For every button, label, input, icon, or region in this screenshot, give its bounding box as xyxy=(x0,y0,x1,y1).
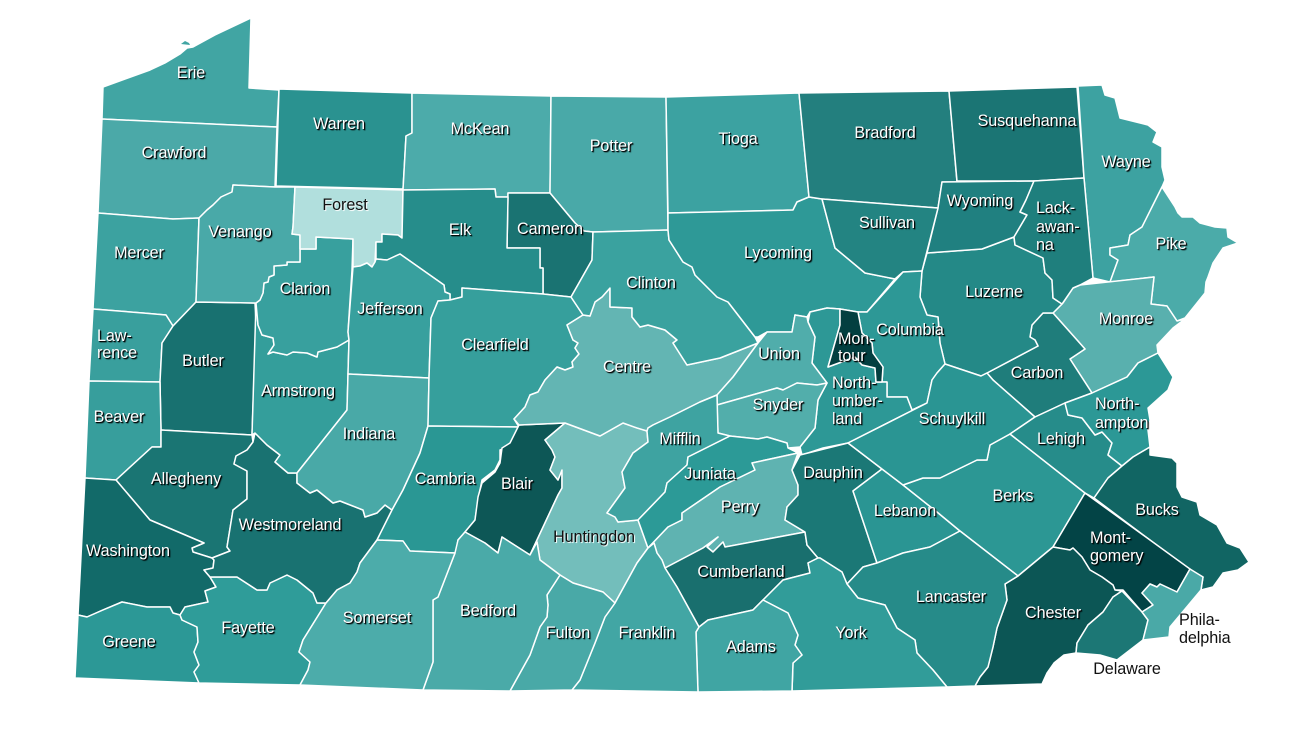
county: Washington xyxy=(78,478,216,617)
label: Clearfield: Clearfield xyxy=(461,336,529,354)
county: Juniata xyxy=(638,436,798,548)
county: Indiana xyxy=(297,374,429,517)
label: Lehigh: Lehigh xyxy=(1037,430,1085,448)
county: Beaver xyxy=(85,381,161,480)
county: Pike xyxy=(1110,187,1238,321)
county: Centre xyxy=(514,288,758,436)
county: Blair xyxy=(465,423,565,555)
county: Elk xyxy=(376,189,543,300)
label: McKean: McKean xyxy=(451,120,509,138)
label: Butler: Butler xyxy=(182,352,225,370)
county: Potter xyxy=(550,96,668,232)
label: Lawrence: rence xyxy=(97,344,137,362)
label: Forest: Forest xyxy=(322,196,368,214)
label: Clarion: Clarion xyxy=(280,280,330,298)
county: Fayette xyxy=(180,575,326,685)
county: Susquehanna xyxy=(949,87,1084,181)
label: Delaware: Delaware xyxy=(1093,660,1161,678)
county: Adams xyxy=(696,600,802,692)
county: Philadelphia xyxy=(1142,569,1203,640)
county: Allegheny xyxy=(116,430,253,558)
county: Northumberland xyxy=(800,308,927,455)
county: Butler xyxy=(160,302,256,435)
county labels xyxy=(86,64,1231,678)
label: Snyder: Snyder xyxy=(753,396,804,414)
label: Potter: Potter xyxy=(590,137,633,155)
label: Tioga: Tioga xyxy=(718,130,758,148)
label: Adams: Adams xyxy=(726,638,776,656)
label: Philadelphia: Phila- xyxy=(1179,611,1220,629)
county: Dauphin xyxy=(785,443,882,584)
county: Lycoming xyxy=(668,197,895,337)
county: Delaware xyxy=(1076,591,1148,660)
label: Lawrence: Law- xyxy=(97,327,132,345)
label: Sullivan: Sullivan xyxy=(859,214,915,232)
county: Lebanon xyxy=(853,469,960,563)
county: Mifflin xyxy=(607,395,730,522)
label: Blair: Blair xyxy=(501,475,534,493)
county: Cambria xyxy=(377,426,519,553)
label: Jefferson: Jefferson xyxy=(357,300,423,318)
label: Huntingdon: Huntingdon xyxy=(553,528,635,546)
label: Wyoming: Wyoming xyxy=(947,192,1013,210)
label: Mifflin: Mifflin xyxy=(659,430,701,448)
label: Indiana: Indiana xyxy=(343,425,395,443)
label: Montgomery: gomery xyxy=(1090,547,1144,565)
label: Greene: Greene xyxy=(102,633,156,651)
county: Wayne xyxy=(1078,85,1165,282)
label: Fayette: Fayette xyxy=(221,619,275,637)
county: Schuylkill xyxy=(848,364,1035,485)
county: Westmoreland xyxy=(204,433,392,603)
county: Venango xyxy=(196,185,300,303)
county: Clarion xyxy=(256,237,353,357)
county: Huntingdon xyxy=(530,423,648,603)
label: Cambria: Cambria xyxy=(415,470,475,488)
label: Philadelphia: delphia xyxy=(1179,629,1231,647)
label: Montour: Mon- xyxy=(838,330,874,348)
label: Columbia: Columbia xyxy=(876,321,944,339)
label: Montgomery: Mont- xyxy=(1090,529,1131,547)
label: Wayne: Wayne xyxy=(1101,153,1151,171)
label: Chester: Chester xyxy=(1025,604,1082,622)
county: Columbia xyxy=(858,271,945,410)
label: Lackawanna: Lack- xyxy=(1036,199,1075,217)
label: York: York xyxy=(835,624,868,642)
label: Monroe: Monroe xyxy=(1099,310,1153,328)
label: Juniata: Juniata xyxy=(684,465,736,483)
label: Schuylkill: Schuylkill xyxy=(919,410,985,428)
county: Greene xyxy=(75,602,199,683)
county: Luzerne xyxy=(920,237,1062,376)
county: Monroe xyxy=(1053,277,1185,393)
county: Wyoming xyxy=(927,181,1034,253)
county: Bucks xyxy=(1094,447,1249,590)
label: Elk: Elk xyxy=(449,221,472,239)
county: York xyxy=(753,558,947,691)
county: Forest xyxy=(292,187,403,267)
county: Union xyxy=(717,315,827,405)
label: Union: Union xyxy=(758,345,800,363)
label: Perry: Perry xyxy=(721,498,760,516)
label: Bradford: Bradford xyxy=(854,124,916,142)
county: Clearfield xyxy=(428,288,583,427)
label: Mercer: Mercer xyxy=(114,244,165,262)
label: Lackawanna: awan- xyxy=(1036,218,1080,236)
label: Berks: Berks xyxy=(993,487,1033,505)
county: Lawrence xyxy=(89,309,173,382)
county: Clinton xyxy=(571,230,758,365)
label: Clinton: Clinton xyxy=(626,274,676,292)
county: Erie xyxy=(102,18,279,127)
county: Sullivan xyxy=(822,199,938,279)
label: Lycoming: Lycoming xyxy=(744,244,812,262)
county: Berks xyxy=(903,434,1085,576)
county: Armstrong xyxy=(252,303,349,473)
county: Cameron xyxy=(507,193,593,297)
county: Snyder xyxy=(717,383,827,448)
county: Bedford xyxy=(423,532,560,691)
label: Cameron: Cameron xyxy=(517,220,583,238)
county: McKean xyxy=(403,93,551,197)
label: Beaver: Beaver xyxy=(94,408,145,426)
label: Montour: tour xyxy=(838,347,866,365)
label: Franklin: Franklin xyxy=(619,624,675,642)
county: Lehigh xyxy=(1010,403,1122,498)
county: Franklin xyxy=(572,543,699,692)
label: Pike: Pike xyxy=(1155,235,1187,253)
label: Allegheny: Allegheny xyxy=(151,470,222,488)
label: Centre: Centre xyxy=(603,358,651,376)
county: Montour xyxy=(828,309,883,382)
label: Northumberland: umber- xyxy=(832,392,883,410)
label: Somerset: Somerset xyxy=(343,609,412,627)
label: Cumberland: Cumberland xyxy=(697,563,785,581)
label: Erie: Erie xyxy=(177,64,205,82)
label: Washington: Washington xyxy=(86,542,170,560)
label: Luzerne: Luzerne xyxy=(965,283,1023,301)
county: Cumberland xyxy=(665,532,818,627)
label: Lancaster: Lancaster xyxy=(916,588,987,606)
label: Bedford: Bedford xyxy=(460,602,516,620)
county: Tioga xyxy=(666,93,809,213)
label: Westmoreland: Westmoreland xyxy=(239,516,341,534)
county: Montgomery xyxy=(1053,493,1190,612)
county: Fulton xyxy=(510,575,615,691)
label: Fulton: Fulton xyxy=(546,624,590,642)
label: Susquehanna: Susquehanna xyxy=(978,112,1076,130)
label: Northumberland: land xyxy=(832,410,862,428)
island: Presque Isle xyxy=(181,41,190,45)
county: Northampton xyxy=(1065,353,1173,466)
county: Bradford xyxy=(799,91,957,208)
label: Northampton: ampton xyxy=(1095,414,1148,432)
label: Armstrong: Armstrong xyxy=(261,382,335,400)
county: Jefferson xyxy=(348,254,450,378)
label: Warren: Warren xyxy=(313,115,365,133)
label: Northampton: North- xyxy=(1095,395,1139,413)
county: Mercer xyxy=(93,213,199,326)
label: Lebanon: Lebanon xyxy=(874,502,936,520)
label: Crawford: Crawford xyxy=(142,144,206,162)
label: Bucks: Bucks xyxy=(1135,501,1179,519)
county: Warren xyxy=(276,89,412,189)
label: Dauphin: Dauphin xyxy=(803,464,863,482)
county: Chester xyxy=(975,547,1122,686)
label: Carbon: Carbon xyxy=(1011,364,1063,382)
county: Crawford xyxy=(98,119,277,219)
label: Lackawanna: na xyxy=(1036,236,1054,254)
county: Somerset xyxy=(299,540,455,690)
county: Lancaster xyxy=(847,531,1018,687)
county: Perry xyxy=(648,453,805,568)
county: Lackawanna xyxy=(1014,178,1093,304)
label: Northumberland: North- xyxy=(832,374,876,392)
county: Carbon xyxy=(987,313,1092,417)
label: Venango: Venango xyxy=(208,223,272,241)
